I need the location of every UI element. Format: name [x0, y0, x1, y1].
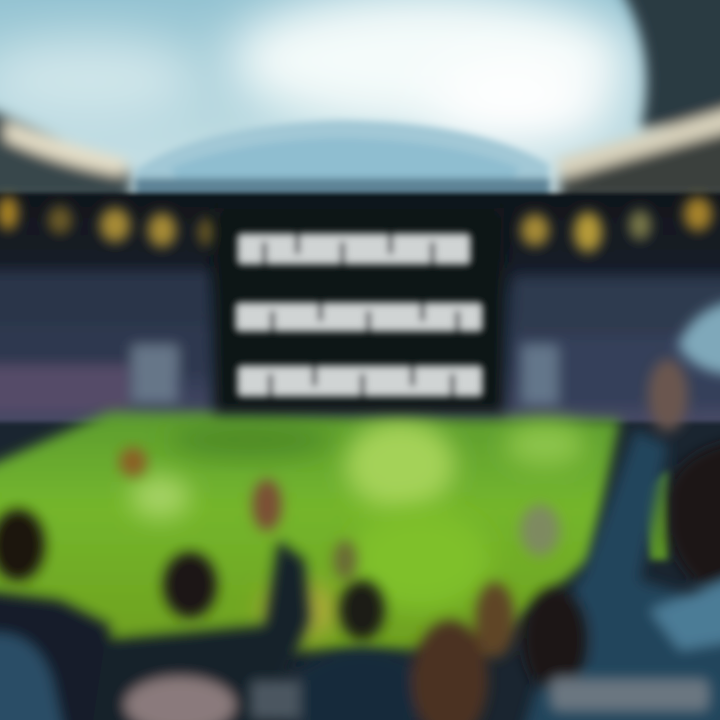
scoreboard — [214, 208, 504, 413]
right stand seating — [515, 278, 720, 405]
crowd right — [520, 300, 720, 720]
left stand seating — [0, 272, 210, 413]
distant roof dome — [135, 120, 550, 196]
stands — [0, 192, 720, 422]
roof left — [0, 105, 130, 200]
crowd centre — [250, 504, 710, 720]
grass pitch — [0, 412, 668, 650]
scoreboard line 2 — [236, 303, 482, 331]
crowd left — [0, 479, 310, 720]
scoreboard line 1 — [238, 234, 470, 264]
stadium lights row — [0, 196, 712, 252]
roof upper right — [555, 0, 720, 200]
scoreboard line 3 — [238, 366, 482, 396]
sky — [0, 0, 720, 200]
